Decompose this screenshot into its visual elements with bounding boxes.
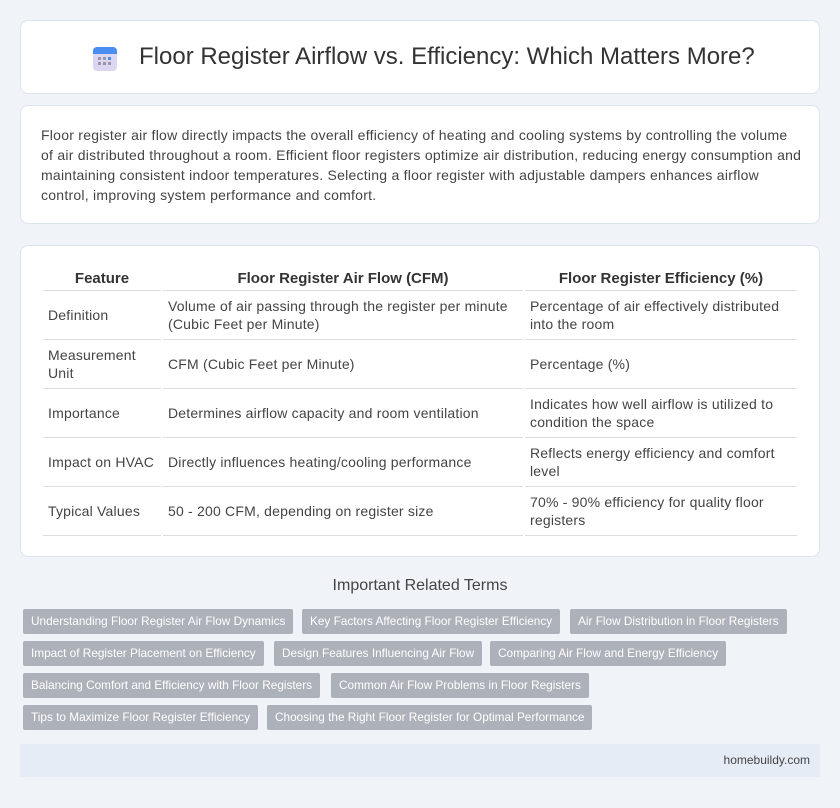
description text: Floor register air flow directly impacts the overall efficiency of heating and cooling systems by controlling the volume of air distributed throughout a room. Efficient floor registers optimize air distribution, reducing energy consumption and maintaining consistent indoor temperatures. Selecting a floor register with adjustable dampers enhances airflow control, improving system performance and comfort.: [41, 127, 801, 203]
description card: [20, 105, 820, 224]
comparison table: Reflects energy efficiency and comfort level: [530, 445, 775, 479]
comparison table: Definition: [48, 307, 108, 323]
tags: Choosing the Right Floor Register for Optimal Performance: [275, 710, 584, 724]
comparison table: Volume of air passing through the register per minute (Cubic Feet per Minute): [168, 298, 508, 332]
tags: Balancing Comfort and Efficiency with Floor Registers: [31, 678, 312, 692]
comparison table: Percentage (%): [530, 356, 630, 372]
tags: Design Features Influencing Air Flow: [282, 646, 474, 660]
comparison table: Floor Register Air Flow (CFM): [237, 270, 449, 286]
tags: Key Factors Affecting Floor Register Efficiency: [310, 614, 552, 628]
comparison table: Typical Values: [48, 503, 140, 519]
tags: Impact of Register Placement on Efficiency: [31, 646, 256, 660]
comparison table: Directly influences heating/cooling performance: [168, 454, 472, 470]
comparison table: 70% - 90% efficiency for quality floor registers: [530, 494, 764, 528]
comparison table: Percentage of air effectively distributed into the room: [530, 298, 779, 332]
comparison table: Floor Register Efficiency (%): [559, 270, 763, 286]
tags: Comparing Air Flow and Energy Efficiency: [498, 646, 718, 660]
comparison table: [43, 270, 797, 536]
tags: Understanding Floor Register Air Flow Dynamics: [31, 614, 285, 628]
comparison table: Measurement Unit: [48, 347, 136, 381]
comparison table: Importance: [48, 405, 120, 421]
comparison table: Determines airflow capacity and room ventilation: [168, 405, 479, 421]
footer: [20, 744, 820, 777]
comparison table: Impact on HVAC: [48, 454, 154, 470]
comparison table: CFM (Cubic Feet per Minute): [168, 356, 355, 372]
title: Floor Register Airflow vs. Efficiency: Which Matters More?: [139, 43, 755, 70]
table card: [20, 245, 820, 557]
tags: Common Air Flow Problems in Floor Registers: [339, 678, 581, 692]
tags: Air Flow Distribution in Floor Registers: [578, 614, 779, 628]
comparison table: 50 - 200 CFM, depending on register size: [168, 503, 434, 519]
comparison table: Indicates how well airflow is utilized to condition the space: [530, 396, 773, 430]
icon: calendar: [93, 47, 117, 71]
tags: Tips to Maximize Floor Register Efficiency: [31, 710, 250, 724]
footer text: homebuildy.com: [724, 753, 810, 767]
related terms heading: Important Related Terms: [333, 577, 507, 594]
title card: [20, 20, 820, 94]
comparison table: Feature: [75, 270, 129, 286]
